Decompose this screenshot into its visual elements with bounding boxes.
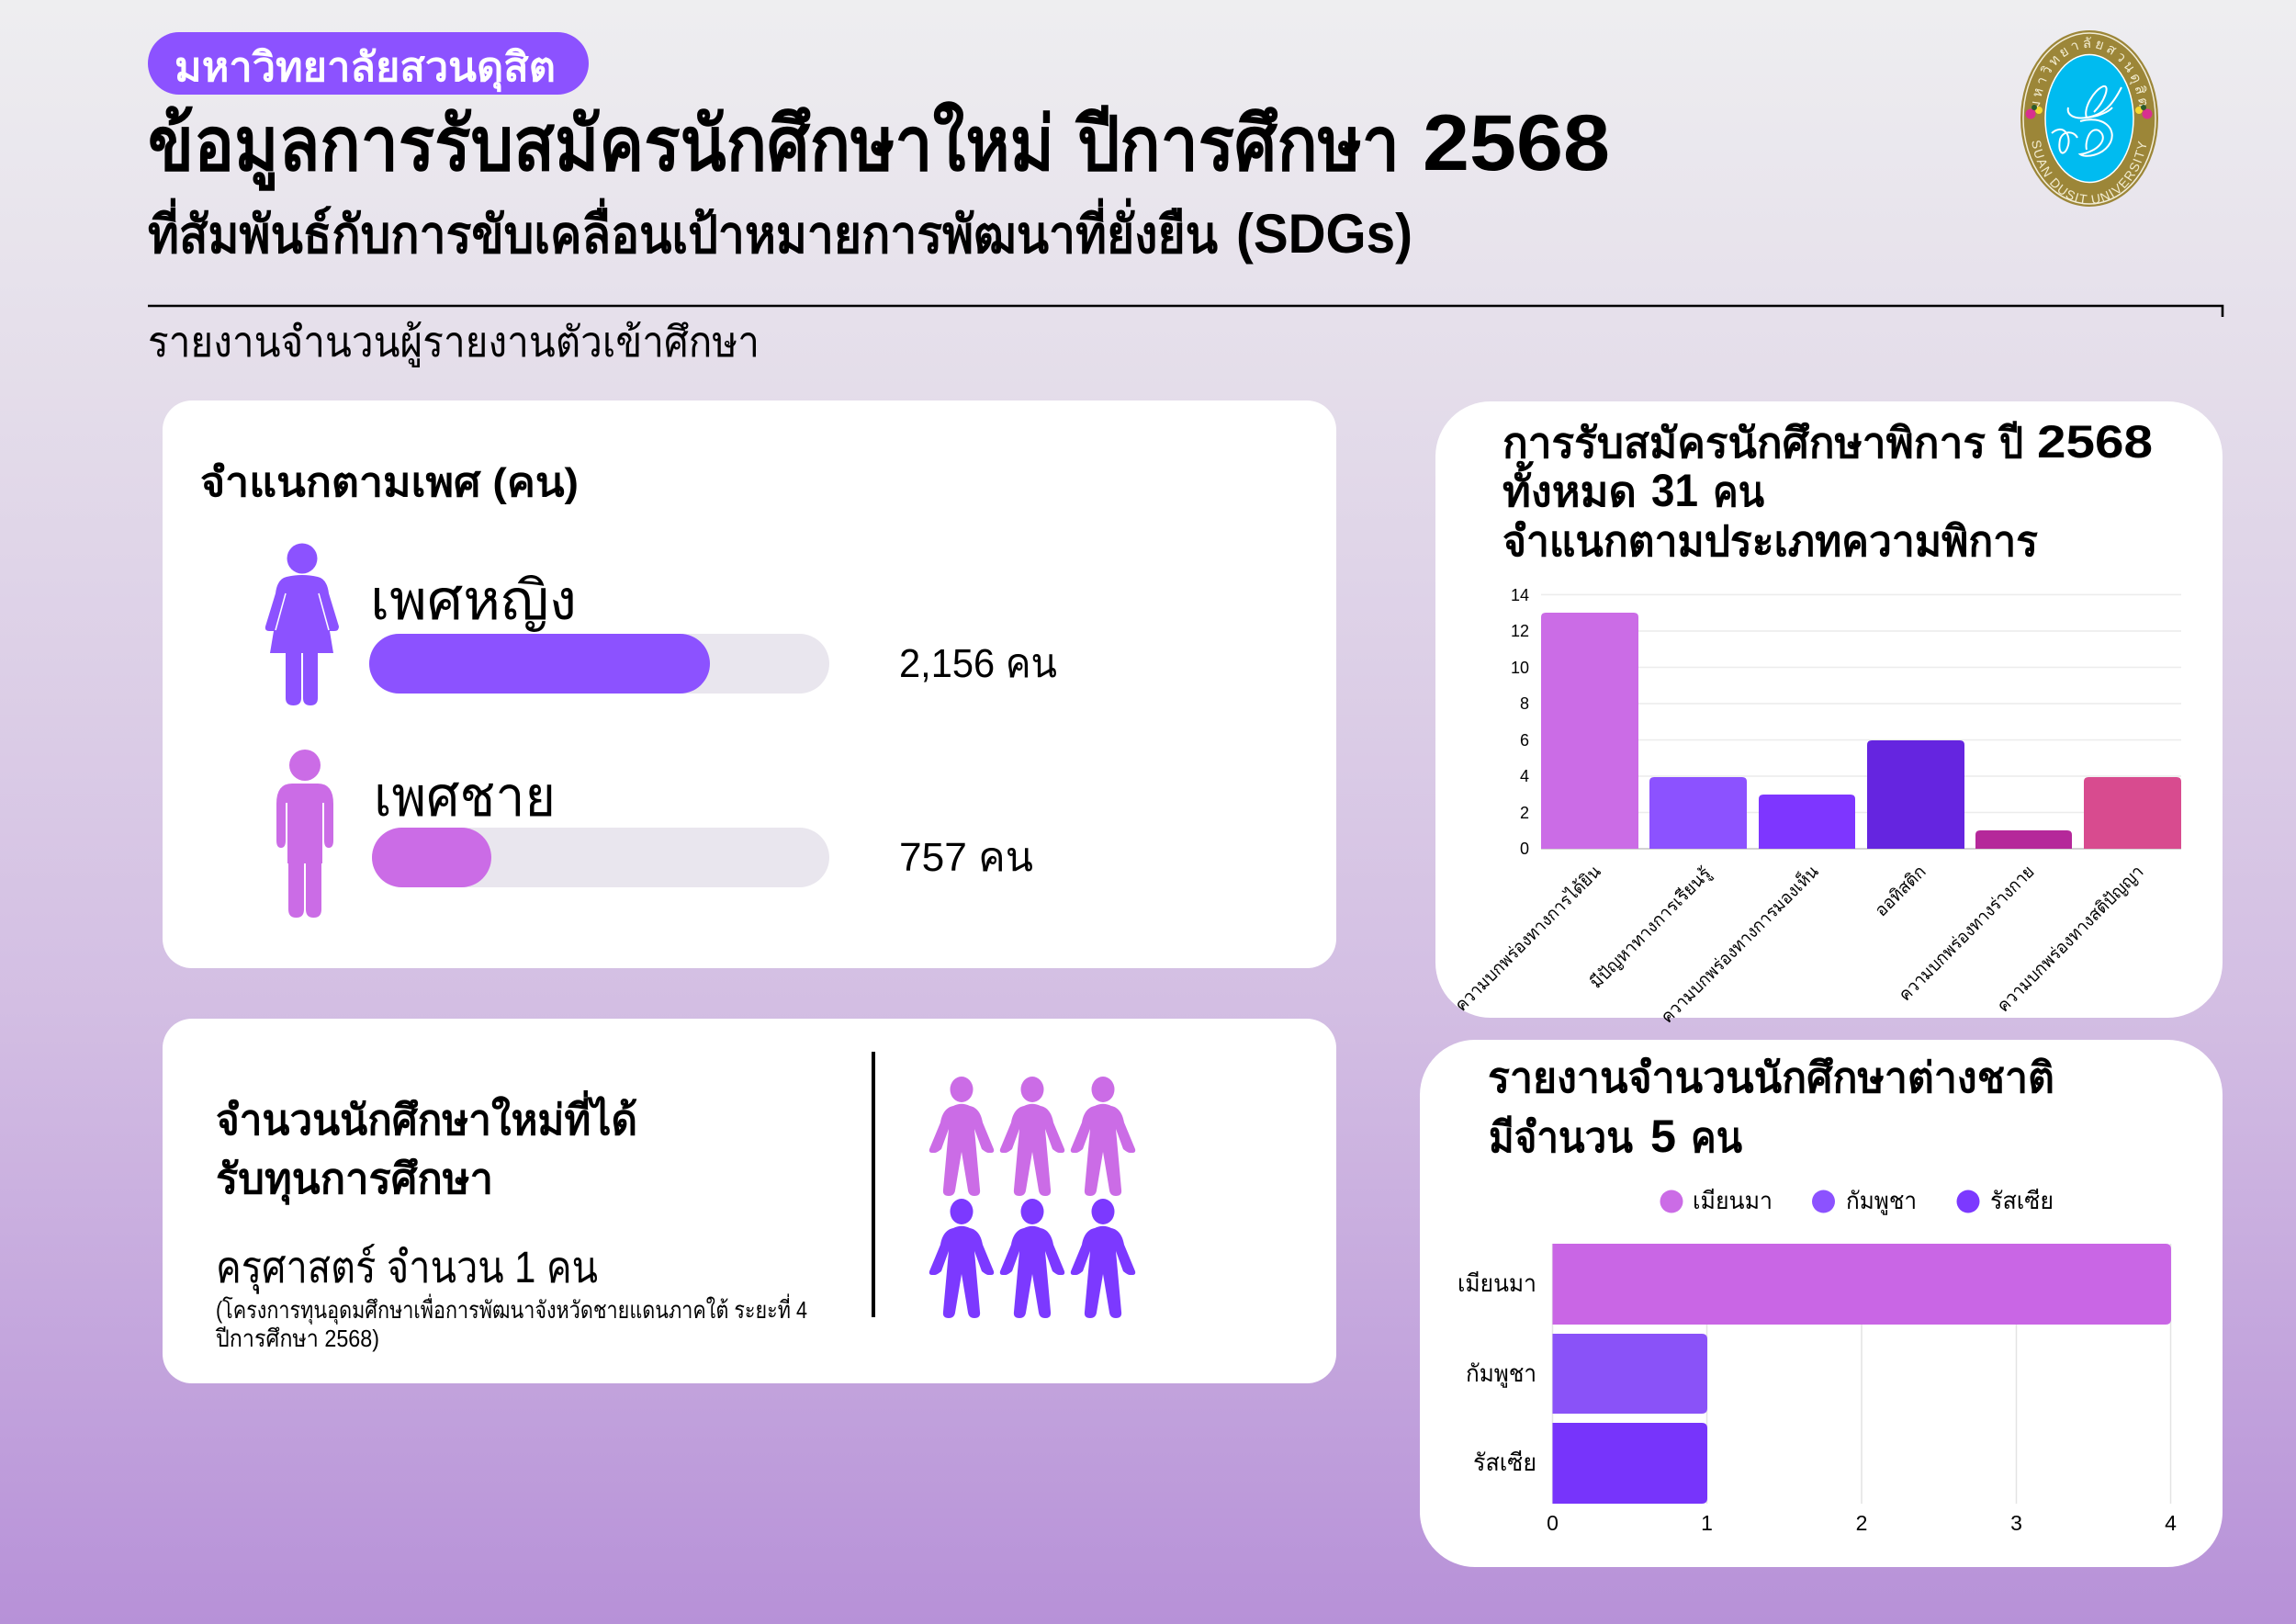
bar chart: disability type: 0 [1520,840,1529,858]
legend: รัสเซีย [1990,1187,2054,1214]
scholarship note [215,1293,807,1352]
bar chart: nationality: 2 [1856,1511,1867,1535]
heading: disabled students [1503,416,2153,565]
progress bar: male [372,828,829,887]
main title: 2568 [1423,99,1610,187]
icon: woman [265,544,339,705]
main title: ปีการศึกษา [1075,103,1400,186]
bar chart: nationality: 3 [2010,1511,2022,1535]
header: university name pill [148,32,589,95]
scholarship note: (โครงการทุนอุดมศึกษาเพื่อการพัฒนาจังหวัดชายแดนภาคใต้ ระยะที่ 4 [216,1293,807,1325]
panel: foreign students [1420,1040,2223,1567]
legend [1660,1187,2054,1215]
heading: foreign students [1488,1054,2054,1162]
icon: man [276,750,333,918]
heading: scholarships: จำนวนนักศึกษาใหม่ที่ได้ [216,1090,637,1144]
header: university name pill: มหาวิทยาลัยสวนดุสิต [174,45,556,93]
scholarship note: ปีการศึกษา 2568) [215,1325,379,1352]
legend: เมียนมา [1693,1187,1773,1214]
label: female: เพศหญิง [370,570,577,632]
heading: scholarships: รับทุนการศึกษา [216,1155,493,1205]
main title [148,99,1610,191]
heading: disabled students: การรับสมัครนักศึกษาพิการ [1503,419,1986,467]
bar chart: disability type: 10 [1511,659,1529,677]
heading: disabled students: จำแนกตามประเภทความพิการ [1503,517,2038,565]
bar chart: disability type: ออทิสติก [1872,863,1930,920]
heading: foreign students: คน [1691,1113,1742,1161]
bar chart: nationality: 4 [2165,1511,2177,1535]
bar chart: nationality: เมียนมา [1458,1269,1536,1297]
heading: disabled students: คน [1713,468,1764,515]
label: male: เพศชาย [374,766,556,828]
header rule [148,306,2223,317]
icon: university logo: มหาวิทยาลัยสวนดุสิต [2032,37,2147,108]
bar chart: nationality [1458,1244,2177,1535]
section heading: รายงานจำนวนผู้รายงานตัวเข้าศึกษา [148,318,760,367]
legend: กัมพูชา [1846,1187,1917,1215]
subtitle: ที่สัมพันธ์กับการขับเคลื่อนเป้าหมายการพัฒนาที่ยั่งยืน [148,197,1218,265]
bar chart: disability type: ความบกพร่องทางการได้ยิน [1451,862,1605,1016]
bar chart: disability type: 6 [1520,731,1529,750]
bar chart: disability type [1451,586,2181,1027]
bar chart: disability type: 2 [1520,804,1529,822]
bar chart: disability type: 14 [1511,586,1529,604]
bar chart: nationality: กัมพูชา [1466,1359,1536,1388]
panel: disabled students [1435,401,2223,1027]
value: male: 757 คน [899,835,1033,880]
bar chart: nationality: 0 [1547,1511,1559,1535]
bar chart: disability type: ความบกพร่องทางการมองเห็น [1656,861,1823,1027]
heading: foreign students: มีจำนวน [1489,1113,1634,1161]
bar chart: nationality: 1 [1701,1511,1713,1535]
progress bar: female [369,634,829,694]
heading: gender: จำแนกตามเพศ (คน) [200,460,579,505]
divider [872,1052,875,1317]
bar chart: nationality: รัสเซีย [1473,1449,1536,1476]
panel: scholarships [163,1019,1336,1383]
panel: gender [163,400,1336,968]
heading: disabled students: ปี [1998,419,2023,467]
heading: disabled students: 2568 [2037,416,2153,468]
subtitle: (SDGs) [1236,203,1412,265]
main title: ข้อมูลการรับสมัครนักศึกษาใหม่ [148,101,1054,191]
icon: university logo [2020,30,2158,207]
bar chart: disability type: 4 [1520,767,1529,785]
icon: group of people [929,1077,1135,1318]
bar chart: disability type: มีปัญหาทางการเรียนรู้ [1586,863,1716,993]
icon: university logo: SUAN DUSIT UNIVERSITY [2032,141,2146,203]
heading: foreign students: รายงานจำนวนนักศึกษาต่างชาติ [1488,1054,2054,1101]
heading: disabled students: ทั้งหมด [1503,460,1637,515]
bar chart: disability type: ความบกพร่องทางสติปัญญา [1994,863,2148,1016]
bar chart: disability type: 8 [1520,694,1529,713]
heading: disabled students: 31 [1651,465,1698,516]
heading: scholarships [216,1090,637,1205]
bar chart: disability type: 12 [1511,622,1529,640]
scholarship count: ครุศาสตร์ จำนวน 1 คน [216,1244,598,1294]
bar chart: disability type: ความบกพร่องทางร่างกาย [1896,863,2039,1005]
value: female: 2,156 คน [899,641,1057,686]
heading: foreign students: 5 [1650,1111,1676,1162]
